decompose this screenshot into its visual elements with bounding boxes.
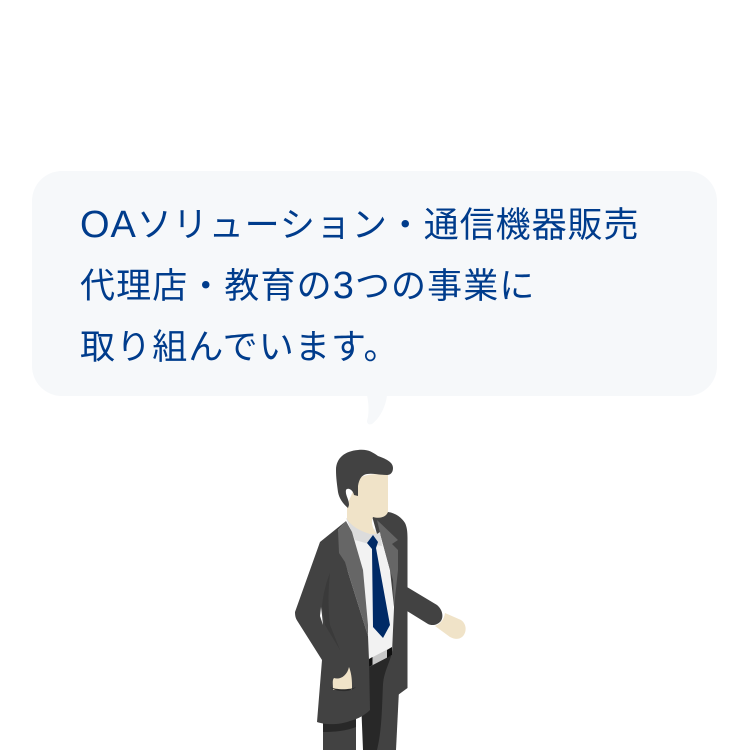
panel: speech bubble: [32, 171, 717, 396]
icon: businessman: [295, 450, 466, 750]
text: line 3: 取り組んでいます。: [80, 328, 400, 367]
pocket hand: [333, 667, 352, 690]
left lapel: [338, 521, 368, 636]
belt: [369, 647, 392, 667]
jacket arm crease: [322, 573, 340, 650]
right trouser leg: [376, 650, 399, 750]
jacket body: [295, 521, 370, 724]
hand: [435, 613, 466, 639]
bubble tail: [367, 395, 387, 424]
hair: [336, 450, 393, 508]
face: [347, 474, 388, 534]
raised arm: [407, 587, 442, 625]
text: line 2: 代理店・教育の3つの事業に: [80, 265, 535, 307]
tie: [367, 535, 390, 638]
text: line 1: OAソリューション・通信機器販売: [80, 204, 639, 246]
jacket right side: [372, 512, 408, 695]
shirt: [350, 525, 393, 662]
right lapel: [377, 520, 398, 607]
left trouser leg: [323, 715, 356, 750]
collar: [346, 518, 382, 546]
